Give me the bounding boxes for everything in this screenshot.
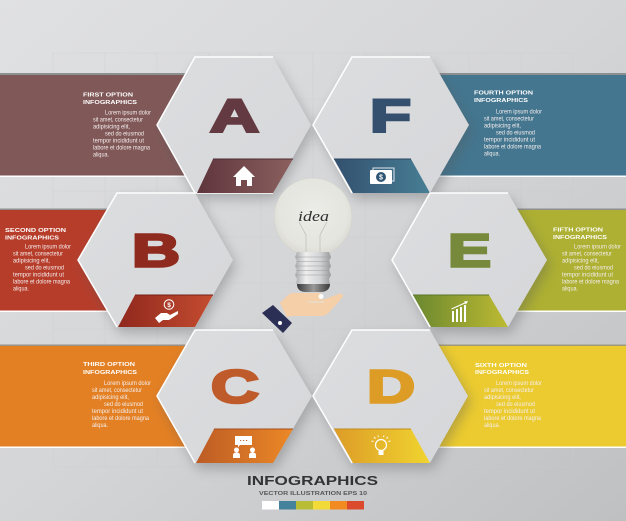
text: first option [83, 93, 151, 158]
text: sixth option: Lorem ipsum dolor [496, 380, 542, 387]
text: first option: Lorem ipsum dolor [105, 109, 151, 116]
text: sixth option: tempor incididunt ut [484, 408, 535, 415]
panel: sixth option band [436, 344, 626, 448]
text: third option: THIRD OPTION [83, 362, 135, 368]
text: fourth option: INFOGRAPHICS [474, 98, 528, 104]
text: second option: INFOGRAPHICS [5, 235, 59, 241]
panel: hexagon E [392, 193, 547, 327]
text: fifth option: sit amet, consectetur [562, 251, 612, 258]
text: second option: sit amet, consectetur [13, 251, 63, 258]
text: fifth option: aliqua. [562, 286, 578, 293]
text: third option: sed do eiusmod [104, 401, 143, 408]
text: fourth option: sed do eiusmod [496, 129, 535, 136]
text: sixth option: adipisicing elit, [484, 394, 521, 401]
text: third option: INFOGRAPHICS [83, 370, 137, 376]
text: fourth option: Lorem ipsum dolor [496, 108, 542, 115]
text: second option [5, 228, 71, 293]
text: fifth option: adipisicing elit, [562, 258, 599, 265]
label: idea: idea [298, 209, 329, 225]
text: fifth option: sed do eiusmod [574, 265, 613, 272]
text: sixth option: sit amet, consectetur [484, 387, 534, 394]
panel: third option band [0, 344, 190, 448]
letter E: E [448, 225, 491, 277]
text: fifth option: INFOGRAPHICS [553, 235, 607, 241]
hexagon drop shadows [81, 64, 550, 469]
tab with hand and coin icon [118, 295, 213, 327]
text: fourth option: FOURTH OPTION [474, 91, 533, 97]
icon: idea light bulb [274, 178, 352, 292]
text: first option: sed do eiusmod [105, 130, 144, 137]
text: fifth option [553, 227, 621, 293]
text: fourth option: sit amet, consectetur [484, 115, 534, 122]
title: INFOGRAPHICS [247, 473, 378, 488]
text: third option: sit amet, consectetur [92, 387, 142, 394]
text: fourth option: adipisicing elit, [484, 122, 521, 129]
panel: second option band [0, 208, 112, 312]
panel: hexagon D [313, 330, 468, 463]
panel: hexagon A [157, 57, 311, 193]
text: second option: sed do eiusmod [25, 265, 64, 272]
text: sixth option: SIXTH OPTION [475, 363, 527, 369]
panel: hexagon B [78, 193, 233, 327]
tab with light bulb icon [334, 429, 430, 463]
tab with growth chart icon [413, 295, 508, 327]
letter A: A [210, 90, 259, 142]
text: second option: aliqua. [13, 286, 29, 293]
text: first option: aliqua. [93, 151, 109, 158]
text: first option: tempor incididunt ut [93, 137, 144, 144]
tab with banknote icon [334, 159, 430, 193]
text: fourth option: tempor incididunt ut [484, 136, 535, 143]
panel: hexagon F [313, 57, 469, 193]
text: fifth option: labore et dolore magna [562, 279, 619, 286]
letter B: B [132, 225, 180, 277]
tab with house icon [197, 159, 293, 193]
text: second option: SECOND OPTION [5, 228, 66, 234]
text: third option: tempor incididunt ut [92, 408, 143, 415]
text: second option: adipisicing elit, [13, 258, 50, 265]
subtitle: VECTOR ILLUSTRATION EPS 10 [259, 491, 367, 497]
text: first option: labore et dolore magna [93, 144, 150, 151]
text: second option: tempor incididunt ut [13, 272, 64, 279]
icon: hand holding bulb [262, 293, 343, 333]
tab with discussion icon [196, 429, 293, 463]
letter D: D [367, 361, 415, 413]
letter F: F [370, 90, 411, 142]
text: sixth option: labore et dolore magna [484, 415, 541, 422]
text: fifth option: Lorem ipsum dolor [574, 244, 621, 251]
text: third option [83, 362, 151, 429]
text: first option: adipisicing elit, [93, 123, 130, 130]
text: third option: labore et dolore magna [92, 415, 149, 422]
text: second option: labore et dolore magna [13, 279, 70, 286]
text: third option: adipisicing elit, [92, 394, 129, 401]
text: first option: FIRST OPTION [83, 93, 133, 99]
text: sixth option: INFOGRAPHICS [475, 370, 529, 376]
panel: hexagon C [157, 330, 312, 463]
text: fourth option: labore et dolore magna [484, 143, 541, 150]
panel: fifth option band [514, 208, 626, 312]
text: second option: Lorem ipsum dolor [25, 244, 71, 251]
text: fifth option: FIFTH OPTION [553, 227, 603, 233]
text: third option: aliqua. [92, 422, 108, 429]
text: sixth option: sed do eiusmod [496, 401, 535, 408]
panel: fourth option band [436, 73, 626, 177]
text: sixth option [475, 363, 542, 429]
text: fifth option: tempor incididunt ut [562, 272, 613, 279]
text: sixth option: aliqua. [484, 422, 500, 429]
text: fourth option [474, 91, 542, 157]
text: first option: INFOGRAPHICS [83, 100, 137, 106]
legend colour swatches [262, 501, 364, 510]
text: third option: Lorem ipsum dolor [104, 380, 151, 387]
tab with banknote icon: $ [379, 174, 383, 182]
tab with hand and coin icon: $ [167, 302, 171, 309]
panel: first option band [0, 73, 190, 177]
text: fourth option: aliqua. [484, 150, 500, 157]
letter C: C [211, 361, 259, 413]
text: first option: sit amet, consectetur [93, 116, 143, 123]
